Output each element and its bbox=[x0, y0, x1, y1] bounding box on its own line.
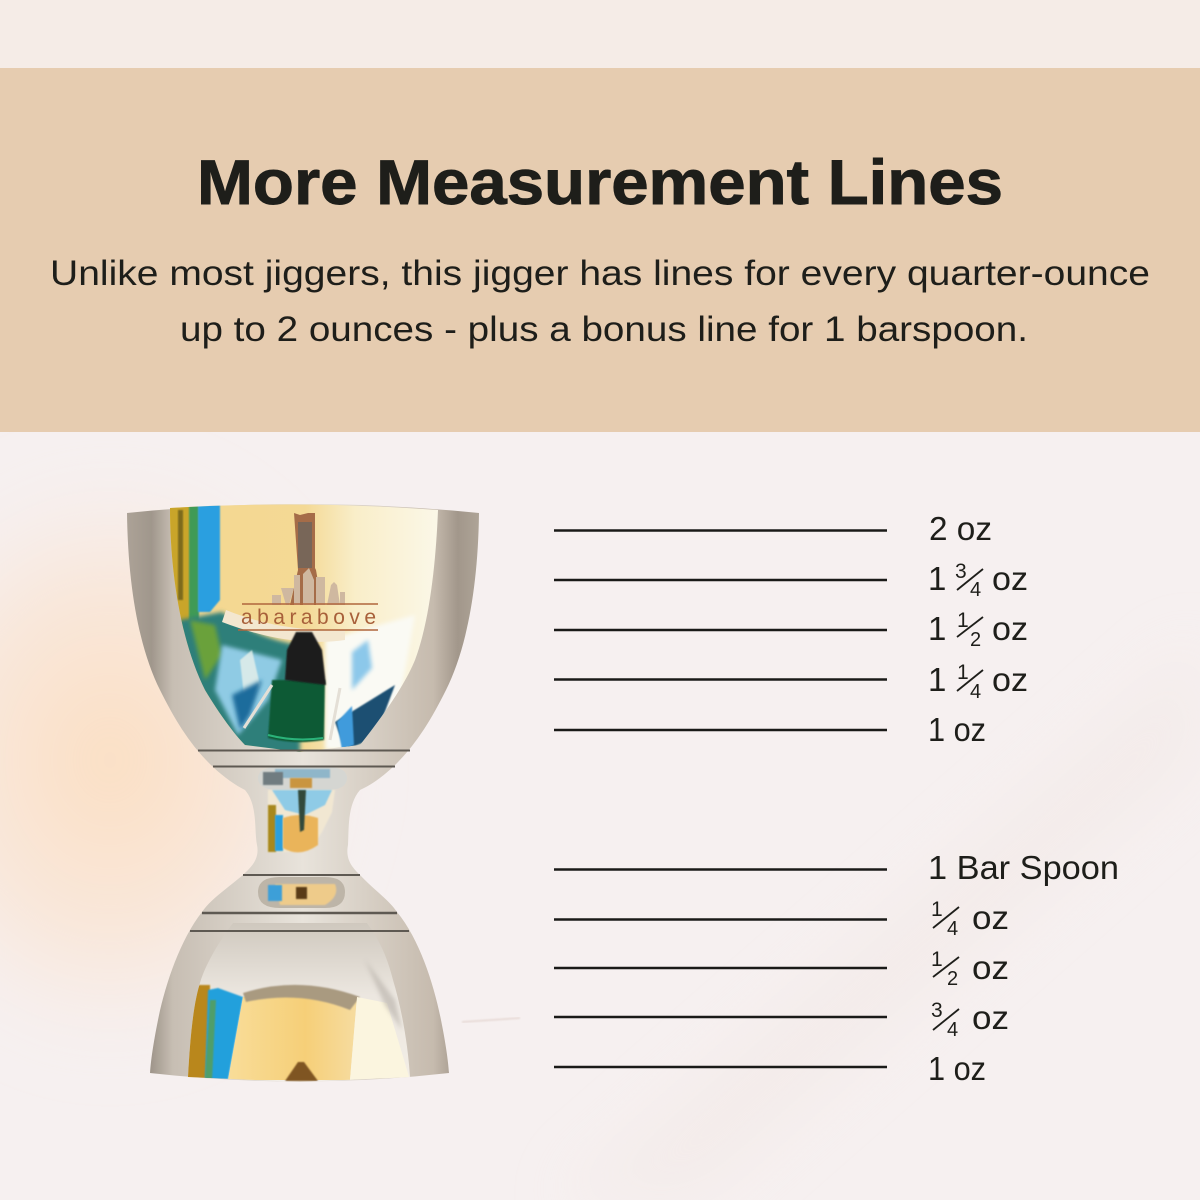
label: 1 1/2 oz: 1 bbox=[957, 609, 969, 632]
label: 1/2 oz: 2 bbox=[947, 968, 958, 990]
banner panel bbox=[0, 68, 1200, 432]
label: 1 3/4 oz: 4 bbox=[970, 579, 981, 601]
label: 1 1/2 oz bbox=[928, 609, 1028, 651]
label: 1 3/4 oz: 3 bbox=[955, 560, 967, 583]
label: 1 3/4 oz: oz bbox=[992, 560, 1028, 597]
lower cup reflection bbox=[180, 923, 420, 1085]
label: 1 1/4 oz: oz bbox=[992, 661, 1028, 698]
label: 1 oz: 1 oz bbox=[928, 711, 986, 748]
label: 3/4 oz: 3 bbox=[931, 999, 943, 1022]
label: 3/4 oz bbox=[931, 999, 1009, 1041]
jigger photo illustration bbox=[127, 500, 479, 1085]
engraved logo bbox=[238, 513, 378, 630]
label: 1/4 oz: oz bbox=[972, 899, 1009, 936]
green bottle reflection bbox=[268, 680, 325, 742]
label: 1 1/4 oz bbox=[928, 661, 1028, 703]
label: 1 1/4 oz: 1 bbox=[957, 661, 969, 684]
heading: More Measurement Lines bbox=[197, 148, 1003, 218]
measurement lines: large cup bbox=[554, 530, 887, 730]
measurement lines: small cup bbox=[554, 870, 887, 1067]
label: 1 1/2 oz: 2 bbox=[970, 629, 981, 651]
engraved rings bbox=[190, 750, 410, 931]
jigger body bbox=[127, 504, 479, 1082]
upper cup reflection bbox=[165, 500, 445, 760]
label: 1 3/4 oz bbox=[928, 560, 1028, 601]
label: 3/4 oz: oz bbox=[972, 999, 1009, 1036]
label: 1 1/4 oz: 1 bbox=[928, 661, 946, 698]
label: 1/4 oz bbox=[931, 898, 1009, 940]
intro text bbox=[50, 254, 1150, 349]
label: 1 3/4 oz: 1 bbox=[928, 560, 946, 597]
label: 1/4 oz: 1 bbox=[931, 898, 943, 921]
label: 1 Bar Spoon: 1 Bar Spoon bbox=[928, 849, 1119, 886]
logo wordmark: abarabove bbox=[241, 606, 376, 629]
label: 1 1/2 oz: oz bbox=[992, 610, 1028, 647]
intro text: Unlike most jiggers, this jigger has lines for every quarter-ounce bbox=[50, 254, 1150, 293]
label: 1/2 oz: 1 bbox=[931, 948, 943, 971]
intro text: up to 2 ounces - plus a bonus line for 1 barspoon. bbox=[180, 310, 1028, 349]
label: 3/4 oz: 4 bbox=[947, 1019, 958, 1041]
label: 1/2 oz: oz bbox=[972, 949, 1009, 986]
label: 1/2 oz bbox=[931, 948, 1009, 990]
label: 1 oz bottom: 1 oz bbox=[928, 1050, 986, 1087]
label: 1/4 oz: 4 bbox=[947, 918, 958, 940]
neck and knobs bbox=[258, 767, 347, 908]
label: 1 1/2 oz: 1 bbox=[928, 610, 946, 647]
label: 1 1/4 oz: 4 bbox=[970, 681, 981, 703]
label: 2 oz: 2 oz bbox=[929, 510, 992, 547]
